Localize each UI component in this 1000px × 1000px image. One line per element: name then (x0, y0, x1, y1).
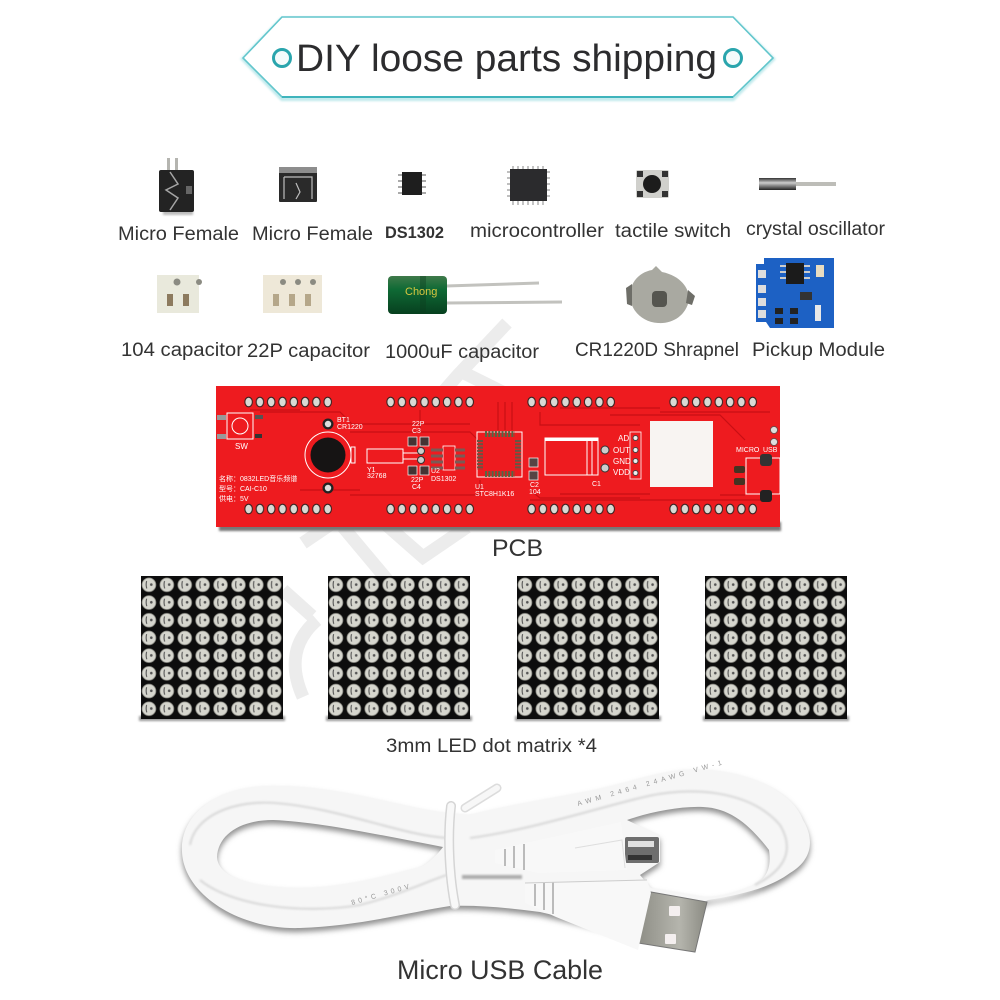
crystal and capacitors footprint: 22P (412, 421, 425, 428)
cable bundle (182, 769, 810, 935)
label: Pickup Module: Pickup Module (752, 340, 885, 361)
C1 footprint (545, 438, 609, 488)
icon: CR1220D shrapnel (626, 266, 695, 323)
USB A plug (525, 880, 707, 952)
battery holder (305, 417, 363, 494)
label: PCB: PCB (492, 535, 543, 562)
crystal and capacitors footprint: 32768 (367, 473, 387, 480)
label: Micro Female 1: Micro Female (118, 224, 239, 245)
USB cable (182, 760, 810, 952)
icon: microcontroller (507, 166, 550, 205)
parts row 1 (118, 158, 886, 245)
cable soft shadow (182, 773, 810, 939)
icon: tactile switch (636, 170, 669, 198)
cable strand seams (190, 791, 787, 909)
label: microcontroller: microcontroller (470, 221, 605, 242)
cable printing: AWM 2464 24AWG VW-1 (577, 760, 723, 808)
crystal and capacitors footprint: 22P (411, 477, 424, 484)
label: 1000uF capacitor: 1000uF capacitor (385, 342, 540, 363)
product text on board (219, 474, 297, 503)
DS1302 footprint: DS1302 (431, 476, 456, 483)
label: 104 capacitor: 104 capacitor (121, 340, 244, 361)
micro USB plug (495, 822, 659, 873)
LED dot matrix 2 (326, 576, 472, 721)
label: Micro USB Cable: Micro USB Cable (397, 955, 603, 985)
pickup pin labels: AD (618, 434, 629, 443)
switch footprint: SW (235, 442, 248, 451)
cable tie (449, 788, 497, 905)
micro USB footprint: MICRO (736, 447, 760, 454)
MCU footprint (475, 432, 522, 498)
header pin holes (243, 395, 758, 516)
PCB traces (250, 402, 770, 500)
icon: crystal oscillator (759, 178, 836, 190)
DS1302 footprint: U2 (431, 468, 440, 475)
LED dot matrix 3 (515, 576, 661, 721)
label: DS1302: DS1302 (385, 223, 444, 242)
crystal and capacitors footprint (367, 421, 429, 491)
product text on board: 型号：CAI-C10 (219, 484, 267, 493)
label: tactile switch: tactile switch (615, 221, 731, 242)
battery holder: BT1 (337, 417, 350, 424)
104 capacitor footprint: 104 (529, 489, 541, 496)
crystal and capacitors footprint: C4 (412, 484, 421, 491)
icon: 1000uF capacitor (388, 276, 562, 314)
white module area (650, 421, 713, 487)
crystal and capacitors footprint: C3 (412, 428, 421, 435)
micro USB footprint: USB (763, 447, 778, 454)
parts row 2 (121, 258, 885, 363)
battery holder: CR1220 (337, 424, 363, 431)
watermark (283, 323, 553, 697)
icon: DS1302 chip (398, 172, 426, 195)
icon: micro female connector 1 (159, 158, 194, 215)
cable printing: 80°C 300V (350, 883, 411, 907)
label: Micro Female 2: Micro Female (252, 224, 373, 245)
104 capacitor footprint (529, 458, 541, 496)
MCU footprint: STC8H1K16 (475, 491, 514, 498)
C1 footprint: C1 (592, 481, 601, 488)
switch footprint (217, 413, 263, 451)
label: crystal oscillator: crystal oscillator (746, 219, 886, 240)
icon: 1000uF capacitor: Chong (405, 286, 437, 298)
micro USB footprint (734, 426, 780, 502)
104 capacitor footprint: C2 (530, 482, 539, 489)
LED dot matrix 4 (703, 576, 849, 721)
title text: DIY loose parts shipping (296, 38, 717, 80)
icon: 22P capacitor (263, 275, 322, 313)
pickup pin labels: OUT (613, 446, 630, 455)
icon: micro female connector 2 (279, 167, 317, 202)
cable printing (350, 760, 723, 907)
label: 3mm LED dot matrix: 3mm LED dot matrix *4 (386, 736, 597, 757)
label: CR1220D Shrapnel: CR1220D Shrapnel (575, 340, 739, 361)
banner dot right (724, 50, 742, 66)
product text on board: 名称：0832LED音乐频谱 (219, 474, 297, 483)
panel: PCB board (216, 386, 781, 531)
icon: pickup module (756, 258, 834, 328)
crystal and capacitors footprint: Y1 (367, 467, 376, 474)
label: 22P capacitor: 22P capacitor (247, 341, 371, 362)
product text on board: 供电：5V (219, 494, 249, 503)
DS1302 footprint (431, 446, 465, 483)
icon: 104 capacitor (157, 275, 202, 313)
banner dot left (274, 50, 290, 66)
LED dot matrix 1 (139, 576, 285, 721)
pickup pin labels (613, 432, 641, 479)
title banner (243, 17, 773, 99)
pickup pin labels: VDD (613, 468, 630, 477)
MCU footprint: U1 (475, 484, 484, 491)
pickup pin labels: GND (613, 457, 631, 466)
